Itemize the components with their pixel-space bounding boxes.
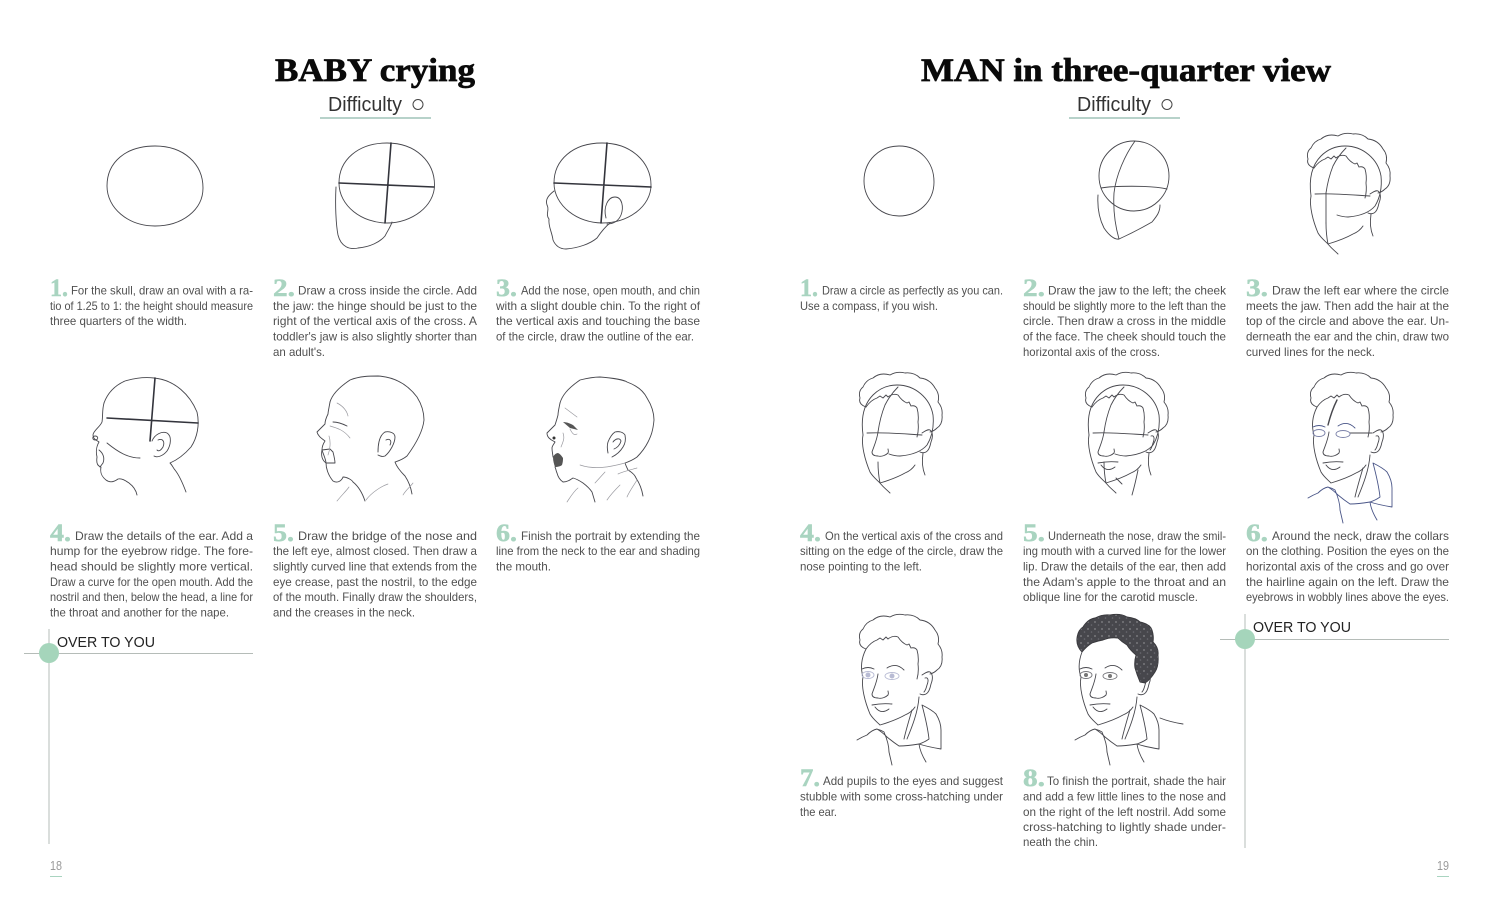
step 6: man: Around the neck, draw the collars (1272, 529, 1449, 543)
page number: 18: 18 (50, 858, 62, 873)
step 5: man: 5. (1023, 520, 1045, 547)
step 3: man: 3. (1246, 275, 1268, 302)
step 7: man (800, 765, 1004, 819)
step 2: baby: an adult's. (273, 345, 325, 359)
illustration: baby step 1 (107, 146, 203, 226)
step 3: baby (495, 275, 701, 344)
step 8: man: on the right of the left nostril. Add some (1023, 805, 1226, 819)
step 3: man: Draw the left ear where the circle (1272, 284, 1449, 298)
title: BABY crying: BABY crying (275, 53, 476, 89)
step 2: baby (273, 275, 477, 359)
over to you panel: left (24, 629, 253, 844)
step 2: man: horizontal axis of the cross. (1023, 345, 1160, 359)
step 7: man: Add pupils to the eyes and suggest (823, 774, 1004, 788)
step 5: baby: slightly curved line that extends from the (273, 560, 477, 574)
illustration: man step 7 (857, 614, 942, 765)
step 4: baby: nostril and then, below the head, a line for (50, 590, 253, 604)
step 6: man: 6. (1246, 520, 1268, 547)
step 4: baby (50, 520, 253, 620)
step 3: man: top of the circle and above the ear. Un- (1246, 314, 1449, 328)
step 5: man: ing mouth with a curved line for the lower (1023, 544, 1226, 558)
difficulty rating: baby (320, 94, 431, 119)
step 3: man: derneath the ear and the chin, draw two (1246, 330, 1449, 344)
step 2: man (1023, 275, 1227, 359)
step 2: baby: Draw a cross inside the circle. Add (298, 284, 477, 298)
step 3: baby: the vertical axis and touching the base (496, 314, 700, 328)
step 7: man: 7. (800, 765, 820, 792)
step 1: man (800, 275, 1003, 313)
step 2: man: of the face. The cheek should touch the (1023, 330, 1226, 344)
step 5: baby: of the mouth. Finally draw the shoulders, (273, 590, 477, 604)
difficulty rating: man (1069, 94, 1180, 119)
step 1: baby: three quarters of the width. (50, 314, 187, 328)
step 5: man: the Adam's apple to the throat and an (1023, 575, 1226, 589)
difficulty rating: baby: Difficulty (328, 94, 402, 116)
step 6: man (1246, 520, 1449, 604)
illustration: man step 5 (1085, 372, 1168, 495)
page number: 19 (1437, 858, 1449, 877)
step 4: man: On the vertical axis of the cross and (825, 529, 1003, 543)
illustration: man step 1 (864, 146, 934, 216)
step 6: man: horizontal axis of the cross and go over (1246, 560, 1449, 574)
illustration: man step 4 (859, 372, 942, 493)
step 2: baby: 2. (273, 275, 295, 302)
step 6: baby (496, 520, 700, 574)
step 5: baby: Draw the bridge of the nose and (298, 529, 477, 543)
illustration: man step 3 (1307, 133, 1390, 254)
illustration: man step 8 (1075, 614, 1183, 765)
step 8: man: neath the chin. (1023, 835, 1098, 849)
step 1: man: 1. (800, 275, 818, 302)
step 2: baby: the jaw: the hinge should be just to the (273, 299, 477, 313)
step 4: baby: the throat and another for the nape. (50, 606, 229, 620)
illustration: baby step 6 (547, 377, 654, 502)
step 5: man: lip. Draw the details of the ear, then add (1023, 560, 1226, 574)
step 7: man: the ear. (800, 805, 837, 819)
difficulty rating: man: Difficulty (1077, 94, 1151, 116)
step 4: man (800, 520, 1003, 574)
step 3: baby: of the circle, draw the outline of the ear. (496, 330, 694, 344)
step 6: baby: Finish the portrait by extending the (521, 529, 700, 543)
step 5: baby: 5. (273, 520, 294, 547)
step 6: baby: the mouth. (496, 560, 551, 574)
step 2: man: Draw the jaw to the left; the cheek (1048, 284, 1227, 298)
step 2: man: circle. Then draw a cross in the middle (1023, 314, 1226, 328)
step 3: man: meets the jaw. Then add the hair at the (1246, 299, 1449, 313)
step 8: man (1023, 765, 1226, 849)
illustration: man step 6 (1308, 372, 1393, 523)
illustration: baby step 4 (93, 378, 198, 495)
step 1: baby: tio of 1.25 to 1: the height should measure (50, 299, 253, 313)
step 2: baby: toddler's jaw is also slightly shorter than (273, 330, 477, 344)
illustration: baby step 5 (317, 376, 424, 501)
step 8: man: 8. (1023, 765, 1045, 792)
step 4: baby: Draw a curve for the open mouth. Add the (50, 575, 253, 589)
illustration: man step 2 (1098, 141, 1169, 239)
step 8: man: and add a few little lines to the nose and (1023, 790, 1226, 804)
title: MAN in three-quarter view: MAN in three-quarter view (921, 53, 1331, 89)
step 5: baby: the left eye, almost closed. Then draw a (273, 544, 477, 558)
step 5: baby: and the creases in the neck. (273, 606, 415, 620)
step 4: baby: head should be slightly more vertical. (50, 560, 253, 574)
step 1: man: Draw a circle as perfectly as you can. (822, 284, 1003, 298)
step 2: man: should be slightly more to the left than the (1023, 299, 1226, 313)
step 8: man: To finish the portrait, shade the hair (1047, 774, 1226, 788)
step 4: man: sitting on the edge of the circle, draw the (800, 544, 1003, 558)
step 1: man: Use a compass, if you wish. (800, 299, 938, 313)
step 8: man: cross-hatching to lightly shade under- (1023, 820, 1226, 834)
page number: 19: 19 (1437, 858, 1449, 873)
step 5: man: Underneath the nose, draw the smil- (1048, 529, 1226, 543)
step 4: baby: hump for the eyebrow ridge. The fore- (50, 544, 253, 558)
step 4: man: nose pointing to the left. (800, 560, 922, 574)
step 3: man: curved lines for the neck. (1246, 345, 1375, 359)
illustration: baby step 3 (546, 143, 651, 249)
step 3: baby: with a slight double chin. To the right of (495, 299, 701, 313)
illustration: baby step 2 (336, 143, 434, 249)
step 1: baby: For the skull, draw an oval with a ra- (71, 284, 253, 298)
step 5: baby (273, 520, 477, 620)
step 1: baby: 1. (50, 275, 68, 302)
step 6: baby: 6. (496, 520, 517, 547)
step 4: baby: Draw the details of the ear. Add a (75, 529, 253, 543)
step 6: man: the hairline again on the left. Draw the (1246, 575, 1449, 589)
step 6: man: eyebrows in wobbly lines above the eyes. (1246, 590, 1449, 604)
over to you panel: right: OVER TO YOU (1253, 619, 1351, 636)
step 5: man (1023, 520, 1226, 604)
step 1: baby (50, 275, 253, 328)
over to you panel: left: OVER TO YOU (57, 634, 155, 651)
step 6: man: on the clothing. Position the eyes on the (1246, 544, 1449, 558)
step 5: man: oblique line for the carotid muscle. (1023, 590, 1198, 604)
step 4: baby: 4. (50, 520, 71, 547)
step 4: man: 4. (800, 520, 821, 547)
step 2: man: 2. (1023, 275, 1045, 302)
page number: 18 (50, 858, 62, 877)
step 3: baby: Add the nose, open mouth, and chin (521, 284, 700, 298)
step 3: man (1246, 275, 1449, 359)
step 2: baby: right of the vertical axis of the cross. A (273, 314, 477, 328)
step 5: baby: eye crease, past the nostril, to the edge (273, 575, 477, 589)
step 7: man: stubble with some cross-hatching under (800, 790, 1003, 804)
step 6: baby: line from the neck to the ear and shading (496, 544, 700, 558)
over to you panel: right (1220, 614, 1449, 848)
step 3: baby: 3. (496, 275, 517, 302)
